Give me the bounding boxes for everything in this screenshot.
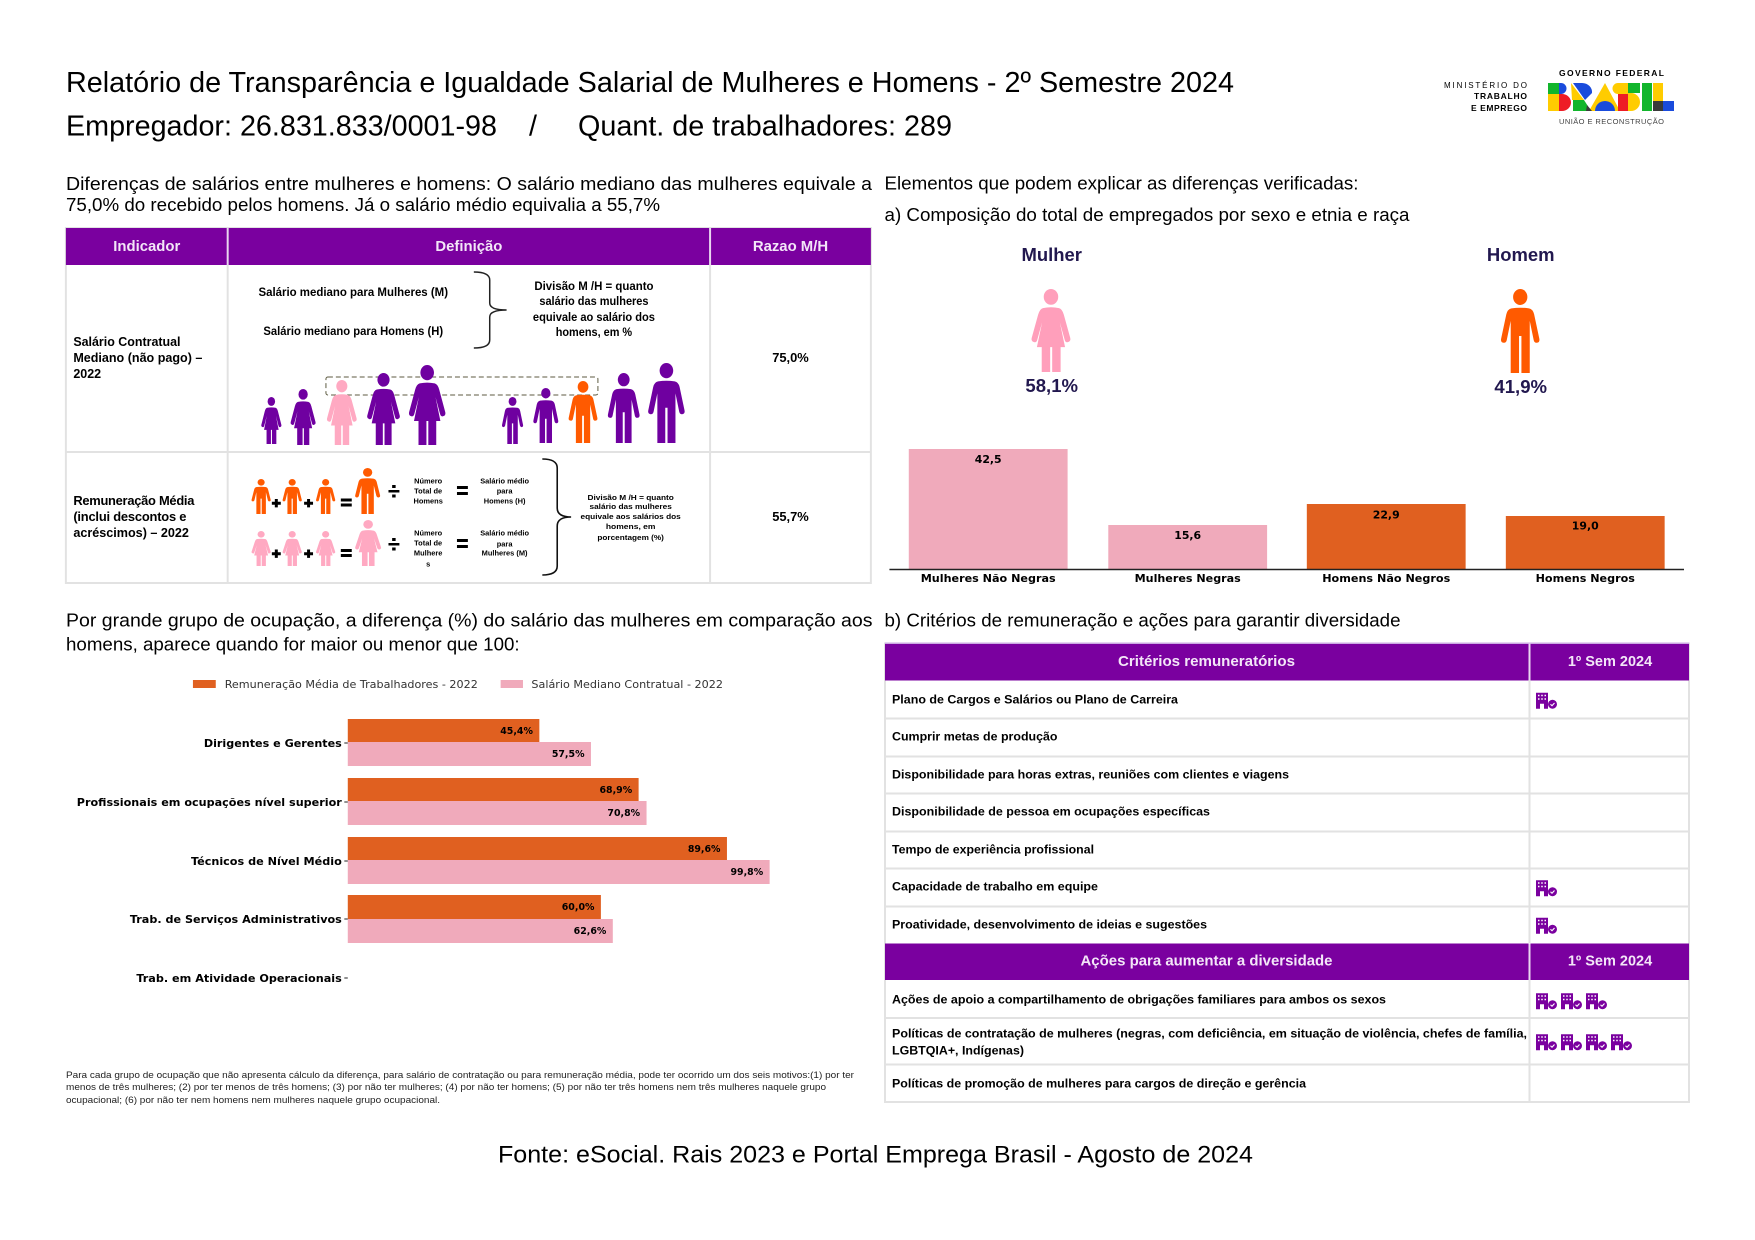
logo: Governo Federal Brasil [1548,68,1674,126]
row 1 division explanation: homens, em % [556,325,633,339]
table header [66,228,871,265]
logo mark BRASIL [1548,83,1674,111]
column chart: composition by race: 42,5 [975,453,1002,466]
man share: 41,9% [1494,376,1547,397]
criteria rows: Plano de Cargos e Salários ou Plano de Carreira [892,693,1178,707]
criteria rows [892,693,1289,932]
women average formula: Número [414,528,443,538]
table header: Definição [435,238,502,255]
row 1 label: Salário Contratual [73,334,181,349]
men average formula: Número [414,476,443,486]
diversity rows: Ações de apoio a compartilhamento de obrigações familiares para ambos os sexos [892,992,1386,1006]
title line 2 [66,110,952,142]
men average formula: Homens (H) [484,496,526,506]
row 1 division explanation: Divisão M /H = quanto [534,279,654,293]
row 2 division explanation: homens, em [606,522,656,531]
column chart: composition by race: Homens Negros [1536,573,1635,585]
criteria rows: Capacidade de trabalho em equipe [892,880,1098,894]
row 2 division explanation: equivale aos salários dos [581,512,681,521]
row 2 division explanation [581,493,681,542]
table header: criteria: Critérios remuneratórios [1118,653,1295,670]
text block: occupation group intro: homens, aparece quando for maior ou menor que 100: [66,634,520,655]
woman share: 58,1% [1025,375,1078,396]
column chart: composition by race: 22,9 [1373,508,1400,522]
value labels [500,726,764,937]
woman share [1021,244,1082,396]
value labels: 89,6% [688,844,721,855]
row 1 median labels: Salário mediano para Mulheres (M) [258,285,448,299]
footnote: Para cada grupo de ocupação que não apresenta cálculo da diferença, para salário de contratação ou para remuneração média, pode ter ocorrido um dos seis motivos:(1) por ter [66,1070,854,1081]
value labels: 68,9% [599,785,633,796]
value labels: 57,5% [552,749,585,760]
category labels [77,738,343,985]
diversity rows: Políticas de promoção de mulheres para cargos de direção e gerência [892,1077,1306,1091]
title line 2: Quant. de trabalhadores: 289 [578,110,952,142]
women average formula: Total de [414,538,442,548]
table header: criteria: 1º Sem 2024 [1568,654,1652,670]
category labels: Trab. de Serviços Administrativos [130,914,342,926]
footnote: ocupacional; (6) por não ter nem homens nem mulheres naquele grupo ocupacional. [66,1095,440,1106]
logo: Governo Federal Brasil: GOVERNO FEDERAL [1559,68,1664,78]
row 1 division explanation: salário das mulheres [539,294,649,308]
men average formula: para [497,486,513,496]
table header: Indicador [113,238,180,255]
criteria rows: Cumprir metas de produção [892,730,1058,744]
text block: occupation group intro [66,610,872,655]
legend: Remuneração Média de Trabalhadores - 2022 [225,679,478,691]
title line 2: Empregador: 26.831.833/0001-98 [66,110,497,142]
row 1 label [73,334,202,381]
text block: explanatory elements heading [884,172,1410,225]
title line 2: / [529,110,537,142]
row 2 division explanation: salário das mulheres [589,502,672,511]
row 1 label: Mediano (não pago) – [73,350,202,365]
text block: explanatory elements heading: a) Composição do total de empregados por sexo e etnia e raça [884,204,1410,225]
women average formula: Salário médio [480,528,529,538]
criteria rows: Disponibilidade de pessoa em ocupações específicas [892,805,1210,819]
text block: salary differences intro: Diferenças de salários entre mulheres e homens: O salário mediano das mulheres equivale a [66,173,873,194]
row 2 brace [542,459,571,575]
logo: Ministério do Trabalho e Emprego: TRABALHO [1474,91,1527,101]
diversity rows [892,992,1527,1091]
people row: men [502,363,685,444]
women average formula: Mulheres (M) [482,548,528,558]
text block: explanatory elements heading: Elementos que podem explicar as diferenças verificadas: [884,172,1358,194]
category labels: Técnicos de Nível Médio [191,856,342,868]
man share [1487,244,1555,397]
row 1 median labels: Salário mediano para Homens (H) [263,324,443,338]
row 1 ratio: 75,0% [772,350,809,365]
column chart: composition by race: Homens Não Negros [1322,573,1450,585]
women average formula: para [497,539,513,549]
value labels: 45,4% [500,726,533,737]
title: report heading [66,67,1234,142]
table header: diversity: 1º Sem 2024 [1568,954,1652,970]
men average formula [252,468,529,514]
category labels: Dirigentes e Gerentes [204,738,342,750]
criteria rows: Tempo de experiência profissional [892,843,1094,857]
legend: Salário Mediano Contratual - 2022 [531,679,723,691]
column chart: composition by race: Mulheres Não Negras [921,573,1056,585]
text block: occupation group intro: Por grande grupo de ocupação, a diferença (%) do salário das mulheres em comparação aos [66,610,872,631]
panel: sex and race composition [889,244,1684,585]
row 1 brace [474,272,507,348]
title line 1: Relatório de Transparência e Igualdade Salarial de Mulheres e Homens - 2º Semestre 2024 [66,67,1234,99]
value labels: 99,8% [731,867,764,878]
column chart: composition by race [889,449,1684,585]
text block: salary differences intro: 75,0% do recebido pelos homens. Já o salário médio equivalia a 55,7% [66,194,660,215]
panel: criteria and diversity table [885,642,1689,1102]
table header: Razao M/H [753,238,828,255]
category labels: Trab. em Atividade Operacionais [136,973,342,985]
table header: diversity [885,944,1689,980]
bars [348,719,770,943]
column chart: composition by race: 19,0 [1572,519,1599,533]
panel: indicator table [66,228,871,583]
value labels: 62,6% [574,926,607,937]
women average formula [252,520,529,569]
logo: Ministério do Trabalho e Emprego: MINISTÉRIO DO [1444,81,1527,90]
value labels: 70,8% [607,808,641,819]
row 2 division explanation: Divisão M /H = quanto [587,493,674,502]
men average formula: Homens [414,496,443,506]
source line: Fonte: eSocial. Rais 2023 e Portal Emprega Brasil - Agosto de 2024 [498,1142,1253,1168]
criteria rows: Disponibilidade para horas extras, reuniões com clientes e viagens [892,768,1289,782]
diversity icons [1536,993,1632,1050]
women average formula: s [426,559,430,569]
value labels: 60,0% [562,902,595,913]
woman share: Mulher [1021,244,1082,265]
column chart: composition by race: Mulheres Negras [1135,573,1241,585]
women average formula: Mulhere [414,548,442,558]
column chart: composition by race: 15,6 [1174,529,1202,542]
row 2 label: (inclui descontos e [73,509,186,524]
text block: remuneration criteria heading: b) Critérios de remuneração e ações para garantir diversidade [884,610,1400,631]
category labels: Profissionais em ocupações nível superior [77,797,343,809]
table header: diversity: Ações para aumentar a diversidade [1080,952,1332,970]
row 2 label: acréscimos) – 2022 [73,525,189,540]
row 2 label: Remuneração Média [73,493,195,508]
footnote: menos de três mulheres; (2) por ter menos de três homens; (3) por não ter mulheres; (4) por não ter homens; (5) por não ter três homens nem três mulheres naquele grupo [66,1082,826,1093]
logo: Governo Federal Brasil: UNIÃO E RECONSTRUÇÃO [1559,117,1664,126]
logo: Ministério do Trabalho e Emprego [1444,81,1527,113]
row 1 division explanation [533,279,655,339]
row 2 label [73,493,195,540]
row 2 division explanation: porcentagem (%) [597,533,664,542]
criteria icons [1536,693,1557,934]
row 2 ratio: 55,7% [772,509,809,524]
logo: Ministério do Trabalho e Emprego: E EMPREGO [1471,103,1527,113]
row 1 label: 2022 [73,366,101,381]
men average formula: Salário médio [480,476,529,486]
diversity rows: LGBTQIA+, Indígenas) [892,1043,1024,1057]
bar chart: difference by occupation group [77,679,770,985]
row 1 median labels [258,285,448,338]
men average formula: Total de [414,486,442,496]
diversity rows: Políticas de contratação de mulheres (negras, com deficiência, em situação de violência, chefes de família, [892,1026,1527,1040]
people row: women [261,365,445,445]
criteria rows: Proatividade, desenvolvimento de ideias e sugestões [892,918,1207,932]
row 1 division explanation: equivale ao salário dos [533,310,655,324]
man share: Homem [1487,244,1555,265]
dashed median box [326,377,598,395]
table header: criteria [885,642,1689,680]
text block: salary differences intro [66,173,873,215]
footnote [66,1070,854,1106]
legend [193,679,723,691]
